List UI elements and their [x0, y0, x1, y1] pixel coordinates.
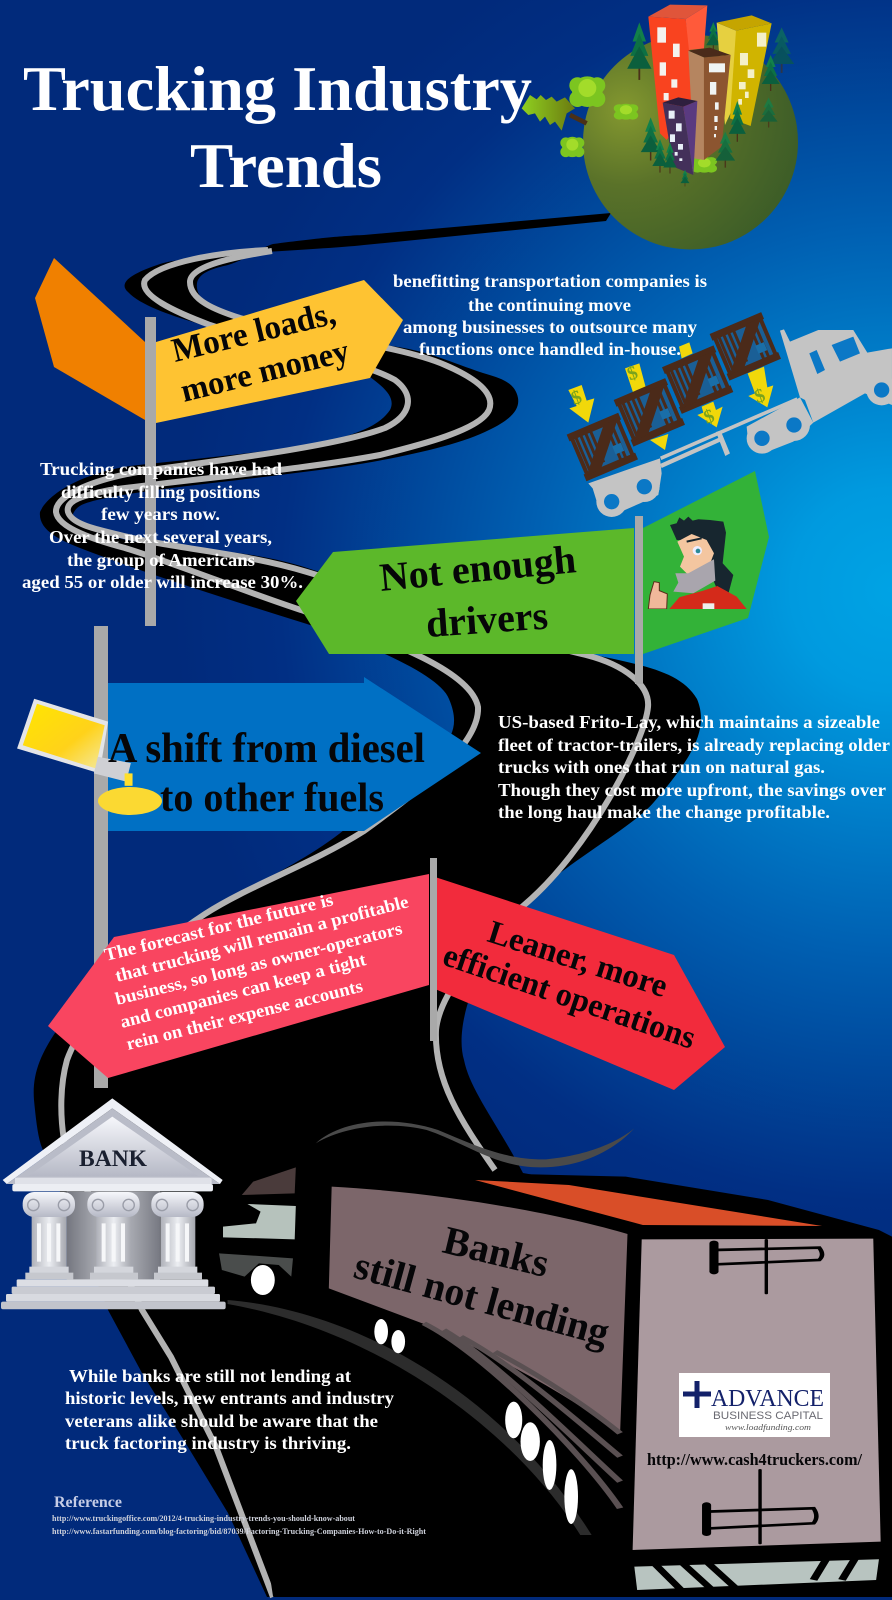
text block: driver shortage — [22, 459, 303, 592]
references: Reference — [54, 1494, 122, 1511]
title: Trends — [190, 130, 382, 201]
sign heading: Not enough — [378, 536, 578, 600]
sign heading: Leaner, more — [484, 914, 672, 1005]
text block: Frito-Lay natural gas: fleet of tractor-trailers, is already replacing older — [498, 735, 890, 755]
buildings and trees on the globe — [522, 5, 794, 186]
sign: Leaner, more efficient operations — [48, 858, 725, 1090]
trailer back panel — [633, 1239, 881, 1550]
front wheel — [251, 1265, 275, 1295]
sign heading: more money — [177, 333, 353, 410]
cab roof — [242, 1167, 296, 1195]
bumper grille — [634, 1557, 879, 1592]
references — [52, 1494, 426, 1536]
trailer roof — [475, 1180, 822, 1226]
forecast text: that trucking will remain a profitable — [113, 891, 411, 986]
globe — [583, 34, 798, 250]
text block: Frito-Lay natural gas: Though they cost more upfront, the savings over — [498, 780, 886, 800]
sign heading — [378, 536, 578, 646]
truck lights — [374, 1319, 578, 1524]
text block: outsourcing: the continuing move — [468, 295, 631, 315]
icon: bank building — [1, 1098, 226, 1309]
dollar arrows — [568, 342, 773, 450]
text block: driver shortage: the group of Americans — [67, 550, 255, 570]
text block: driver shortage: difficulty filling positions — [61, 482, 260, 502]
text block: outsourcing — [393, 271, 707, 359]
sign pole — [635, 516, 643, 684]
icon: bearded driver giving thumbs up — [648, 517, 747, 610]
trailer side panel — [329, 1187, 627, 1433]
text block: Frito-Lay natural gas: trucks with ones that run on natural gas. — [498, 757, 825, 777]
bank heading on truck: Banks still not lending: Banks — [439, 1217, 553, 1286]
logo: Advance Business Capital: www.loadfunding.com — [725, 1422, 811, 1432]
green arrow — [296, 528, 634, 654]
icon: fuel splat — [98, 787, 162, 815]
truck silhouette — [588, 329, 892, 517]
icon: fuel can pouring — [17, 699, 133, 786]
road swoosh — [228, 1300, 592, 1535]
forecast text: business, so long as owner-operators — [113, 918, 404, 1009]
logo: Advance Business Capital: BUSINESS CAPITAL — [713, 1410, 823, 1422]
sign heading: A shift from diesel — [108, 726, 425, 772]
text block: driver shortage: Over the next several years, — [49, 527, 272, 547]
bank label: BANK — [79, 1146, 148, 1172]
left red arrow — [48, 874, 429, 1078]
illustration: truck hauling crates with dollar arrows: $ — [569, 387, 585, 410]
sign: Not enough drivers — [296, 471, 769, 684]
yellow arrow — [156, 280, 403, 423]
illustration: city on a green globe — [522, 5, 798, 250]
sign heading: More loads, — [168, 295, 339, 370]
text block: Frito-Lay natural gas: the long haul make the change profitable. — [498, 802, 830, 822]
text block: outsourcing: among businesses to outsource many — [403, 317, 697, 337]
logo: Advance Business Capital — [679, 1373, 830, 1437]
title: Trucking Industry — [23, 53, 532, 124]
illustration: truck hauling crates with dollar arrows: $ — [752, 385, 768, 408]
forecast text: The forecast for the future is — [102, 889, 335, 965]
sign heading: to other fuels — [160, 774, 384, 820]
blue arrow — [108, 677, 481, 831]
crates — [567, 413, 638, 481]
sign heading — [168, 295, 353, 410]
columns — [23, 1192, 204, 1279]
sign pole — [430, 858, 437, 1041]
sign heading — [108, 726, 425, 820]
sign heading: drivers — [424, 593, 549, 646]
forecast text: and companies can keep a tight — [118, 949, 368, 1032]
sign back: orange — [35, 258, 145, 420]
text block: truck factoring — [65, 1366, 394, 1453]
illustration: truck hauling crates with dollar arrows — [567, 312, 892, 517]
illustration: large truck — [219, 1121, 892, 1597]
truck silhouette — [228, 1173, 892, 1597]
sign heading: efficient operations — [438, 937, 700, 1057]
door handles — [707, 1240, 822, 1543]
text block: truck factoring: truck factoring industry is thriving. — [65, 1433, 351, 1453]
right red arrow — [435, 877, 725, 1090]
text block: Frito-Lay natural gas: US-based Frito-Lay, which maintains a sizeable — [498, 712, 880, 732]
text block: driver shortage: few years now. — [101, 504, 220, 524]
text block: truck factoring: historic levels, new entrants and industry — [65, 1388, 394, 1408]
sign pole — [145, 317, 156, 626]
references: http://www.fastarfunding.com/blog-factoring/bid/87039/Factoring-Trucking-Companies-How-to-Do-it-Right — [52, 1527, 426, 1536]
forecast text — [102, 889, 411, 1054]
bank heading on truck: Banks still not lending: still not lending — [350, 1242, 614, 1355]
side stripes — [424, 1323, 620, 1508]
sign back: dark green — [643, 471, 769, 654]
text block: truck factoring: While banks are still not lending at — [69, 1366, 351, 1386]
text block: truck factoring: veterans alike should be aware that the — [65, 1411, 378, 1431]
cab lower panel — [219, 1253, 293, 1277]
text block: driver shortage: aged 55 or older will increase 30%. — [22, 572, 303, 592]
sign: A shift from diesel to other fuels — [17, 626, 481, 1088]
logo: Advance Business Capital: ADVANCE — [711, 1386, 824, 1412]
sign: More loads, more money — [35, 258, 403, 626]
text block: outsourcing: functions once handled in-house. — [419, 339, 681, 359]
title — [23, 53, 532, 201]
roof swoosh — [316, 1121, 634, 1167]
references: http://www.truckingoffice.com/2012/4-trucking-industry-trends-you-should-know-about — [52, 1514, 355, 1523]
illustration: truck hauling crates with dollar arrows: $ — [625, 362, 641, 385]
text block: Frito-Lay natural gas — [498, 712, 890, 822]
text block: outsourcing: benefitting transportation companies is — [393, 271, 707, 291]
sign pole — [94, 626, 108, 1088]
forecast text: rein on their expense accounts — [124, 976, 365, 1054]
illustration: truck hauling crates with dollar arrows: $ — [701, 406, 718, 429]
website url: http://www.cash4truckers.com/ — [647, 1450, 862, 1469]
cab window — [223, 1204, 296, 1239]
text block: driver shortage: Trucking companies have had — [40, 459, 282, 479]
